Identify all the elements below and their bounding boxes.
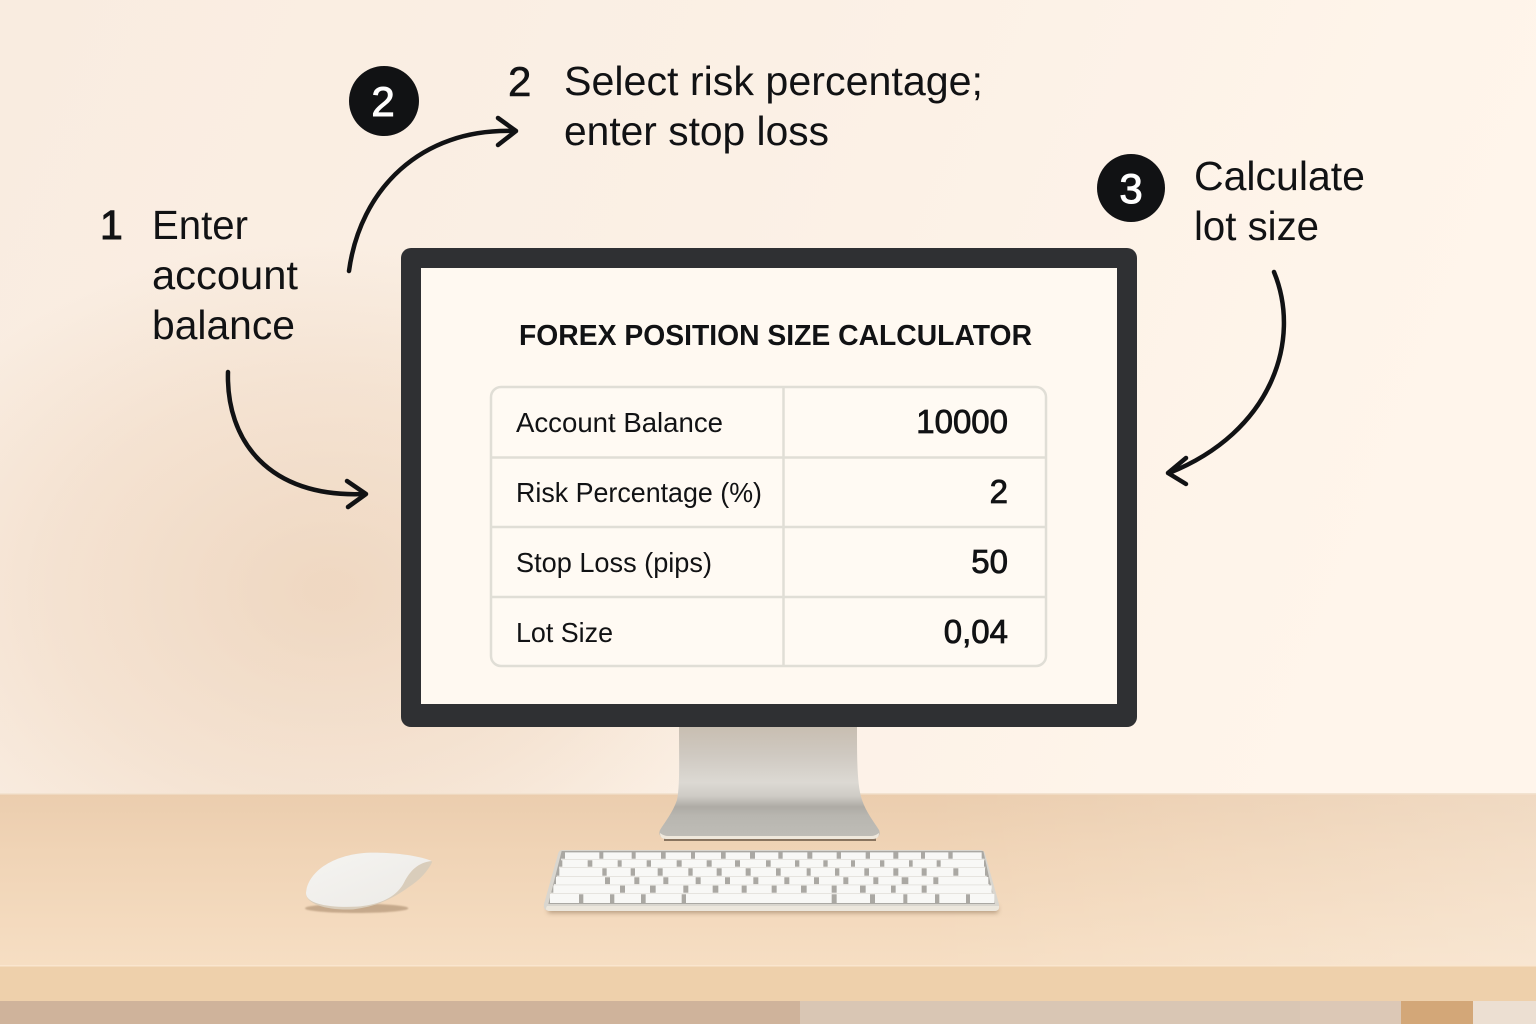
desk <box>0 793 1536 1024</box>
row: account balance: Account Balance <box>516 407 723 438</box>
step 2 label: 2 <box>508 58 531 105</box>
row: stop loss: 50 <box>971 543 1008 580</box>
step 1 label <box>100 202 299 348</box>
step 1 label: account <box>152 252 299 298</box>
row: risk percentage <box>516 473 1008 510</box>
calculator table <box>491 387 1046 666</box>
step 1 label: 1 <box>100 202 123 248</box>
calculator title: FOREX POSITION SIZE CALCULATOR <box>519 320 1032 352</box>
step 1 label: Enter <box>152 202 248 248</box>
badge: step 3 <box>1097 154 1165 222</box>
arrow: step 1 to step 2 <box>349 118 516 271</box>
arrow: step 1 to screen <box>228 372 366 507</box>
step 2 label: Select risk percentage; <box>564 58 983 104</box>
step 3 label <box>1194 153 1365 249</box>
row: account balance: 10000 <box>916 403 1008 440</box>
badge: step 2 <box>349 66 419 136</box>
step 3 label: Calculate <box>1194 153 1365 199</box>
badge: step 3: 3 <box>1119 165 1143 212</box>
mouse <box>305 853 432 913</box>
badge: step 2: 2 <box>371 78 395 125</box>
row: lot size: 0,04 <box>944 613 1008 650</box>
step 1 label: balance <box>152 302 295 348</box>
keyboard <box>544 850 999 913</box>
row: lot size <box>516 613 1008 650</box>
monitor stand <box>659 727 880 841</box>
row: stop loss: Stop Loss (pips) <box>516 547 712 578</box>
arrow: step 3 to screen <box>1168 272 1284 484</box>
step 3 label: lot size <box>1194 203 1319 249</box>
row: account balance <box>516 403 1008 440</box>
step 2 label: enter stop loss <box>564 108 829 154</box>
screen <box>421 268 1117 704</box>
row: risk percentage: 2 <box>990 473 1008 510</box>
keys <box>548 851 995 904</box>
row: stop loss <box>516 543 1008 580</box>
row: risk percentage: Risk Percentage (%) <box>516 477 762 508</box>
row: lot size: Lot Size <box>516 617 613 648</box>
monitor <box>401 248 1137 727</box>
step 2 label <box>508 58 983 154</box>
